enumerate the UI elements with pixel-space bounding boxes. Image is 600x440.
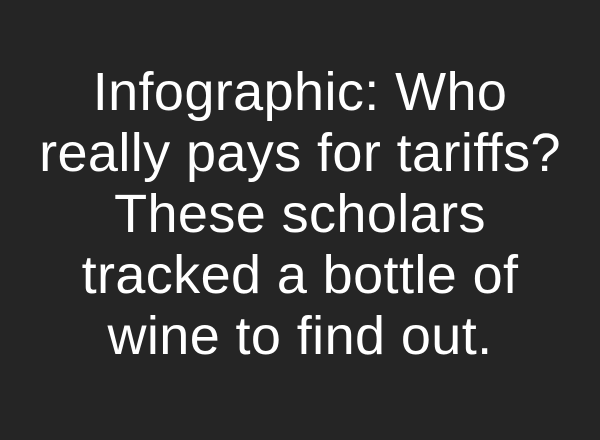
title: tracked a bottle of <box>82 245 518 305</box>
title: These scholars <box>114 184 486 244</box>
title: really pays for tariffs? <box>39 123 561 183</box>
title: Infographic: Who <box>93 62 507 122</box>
title: wine to find out. <box>107 306 493 366</box>
title <box>39 62 561 366</box>
